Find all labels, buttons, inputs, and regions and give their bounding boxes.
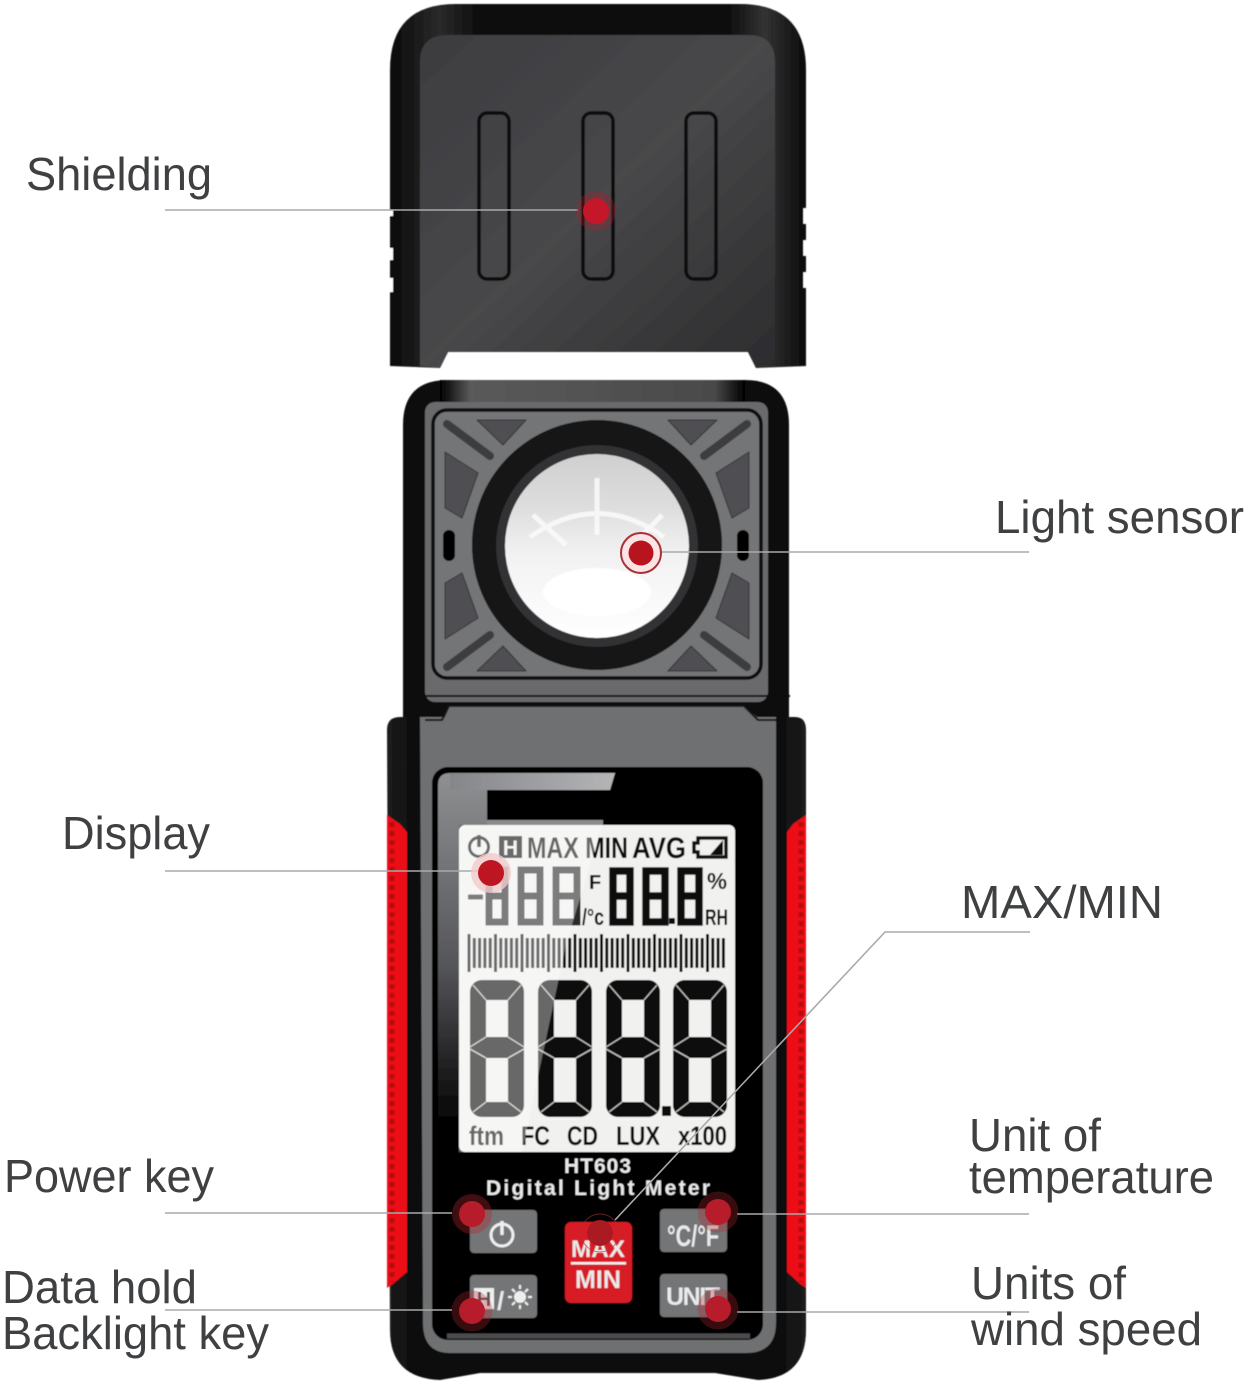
- LCD main digit 3: [606, 980, 660, 1117]
- marker: shielding: [576, 191, 616, 231]
- LCD status row: [470, 832, 726, 865]
- label: unit of temperature: temperature: [969, 1151, 1214, 1203]
- label: power key: Power key: [4, 1150, 214, 1202]
- LCD status row: H: [503, 837, 518, 860]
- label: units of wind speed: [970, 1257, 1202, 1355]
- LCD status row: MAX MIN: [527, 832, 628, 865]
- label: units of wind speed: wind speed: [970, 1303, 1202, 1355]
- marker: data hold: [452, 1291, 492, 1331]
- cap slots: [479, 113, 716, 279]
- LCD unit marks: [582, 868, 728, 930]
- model name: Digital Light Meter: [486, 1177, 710, 1200]
- button: data hold and backlight: [470, 1275, 537, 1318]
- left red grip: [387, 815, 407, 1288]
- LCD unit marks: /°c: [582, 904, 604, 930]
- marker: power key: [452, 1194, 492, 1234]
- button: power: [470, 1210, 537, 1253]
- protective shielding cap: [390, 4, 806, 368]
- leader lines: [165, 210, 1030, 1312]
- marker: display: [471, 853, 511, 893]
- marker: max/min: [581, 1214, 619, 1252]
- LCD unit row: FC: [521, 1121, 550, 1151]
- label: unit of temperature: [969, 1109, 1214, 1203]
- LCD unit row: CD: [567, 1121, 598, 1151]
- label: data hold backlight key: Data hold: [2, 1261, 197, 1313]
- sensor housing: [433, 410, 761, 678]
- sensor ring: [472, 420, 722, 670]
- LCD status row: AVG: [632, 832, 686, 865]
- screen bezel: [432, 767, 763, 1340]
- label: units of wind speed: Units of: [971, 1257, 1126, 1309]
- LCD temperature digits: [468, 870, 577, 922]
- model name: [486, 1155, 710, 1200]
- LCD panel: [459, 825, 735, 1152]
- button: unit: [660, 1274, 727, 1317]
- button: max/min: [565, 1222, 632, 1303]
- housing vents: [445, 420, 749, 671]
- marker: units of wind speed: [698, 1289, 738, 1329]
- label: display: Display: [62, 807, 210, 859]
- LCD main digit 4: [673, 980, 727, 1117]
- screen glare: [438, 773, 615, 1120]
- button: unit of temperature: °C/°F: [667, 1220, 719, 1253]
- LCD main digit 1: [470, 980, 524, 1117]
- LCD unit marks: F: [589, 872, 601, 894]
- label: shielding: Shielding: [26, 148, 212, 200]
- light sensor lens: [505, 454, 689, 638]
- marker: light sensor: [621, 533, 661, 573]
- right red grip: [787, 815, 806, 1288]
- button: data hold and backlight: H: [477, 1289, 491, 1311]
- LCD unit marks: %: [707, 868, 727, 894]
- label: light sensor: Light sensor: [995, 491, 1244, 543]
- button: data hold and backlight: /: [497, 1286, 504, 1316]
- button: max/min: MIN: [575, 1266, 621, 1294]
- LCD unit row: LUX: [616, 1121, 660, 1151]
- button: unit of temperature: [660, 1209, 727, 1253]
- sensor head: [403, 380, 789, 720]
- label: max/min: MAX/MIN: [961, 876, 1163, 928]
- label: data hold backlight key: [2, 1261, 269, 1359]
- button: max/min: MAX: [571, 1236, 625, 1263]
- LCD humidity digits: [613, 871, 699, 924]
- main body: [387, 696, 806, 1380]
- LCD unit marks: RH: [705, 905, 728, 930]
- marker: unit of temperature: [698, 1192, 738, 1232]
- button: unit: UNIT: [666, 1283, 720, 1311]
- LCD unit row: ftm: [469, 1121, 504, 1151]
- LCD unit row: x100: [678, 1121, 727, 1151]
- LCD glare overlay: [459, 825, 602, 1152]
- label: data hold backlight key: Backlight key: [2, 1307, 269, 1359]
- label: unit of temperature: Unit of: [969, 1109, 1101, 1161]
- icon: sun: [508, 1285, 532, 1309]
- LCD bar scale: [469, 934, 723, 972]
- model name: HT603: [564, 1155, 632, 1178]
- device illustration: [387, 4, 806, 1380]
- LCD unit row: [469, 1121, 727, 1151]
- LCD main digit 2: [538, 980, 592, 1117]
